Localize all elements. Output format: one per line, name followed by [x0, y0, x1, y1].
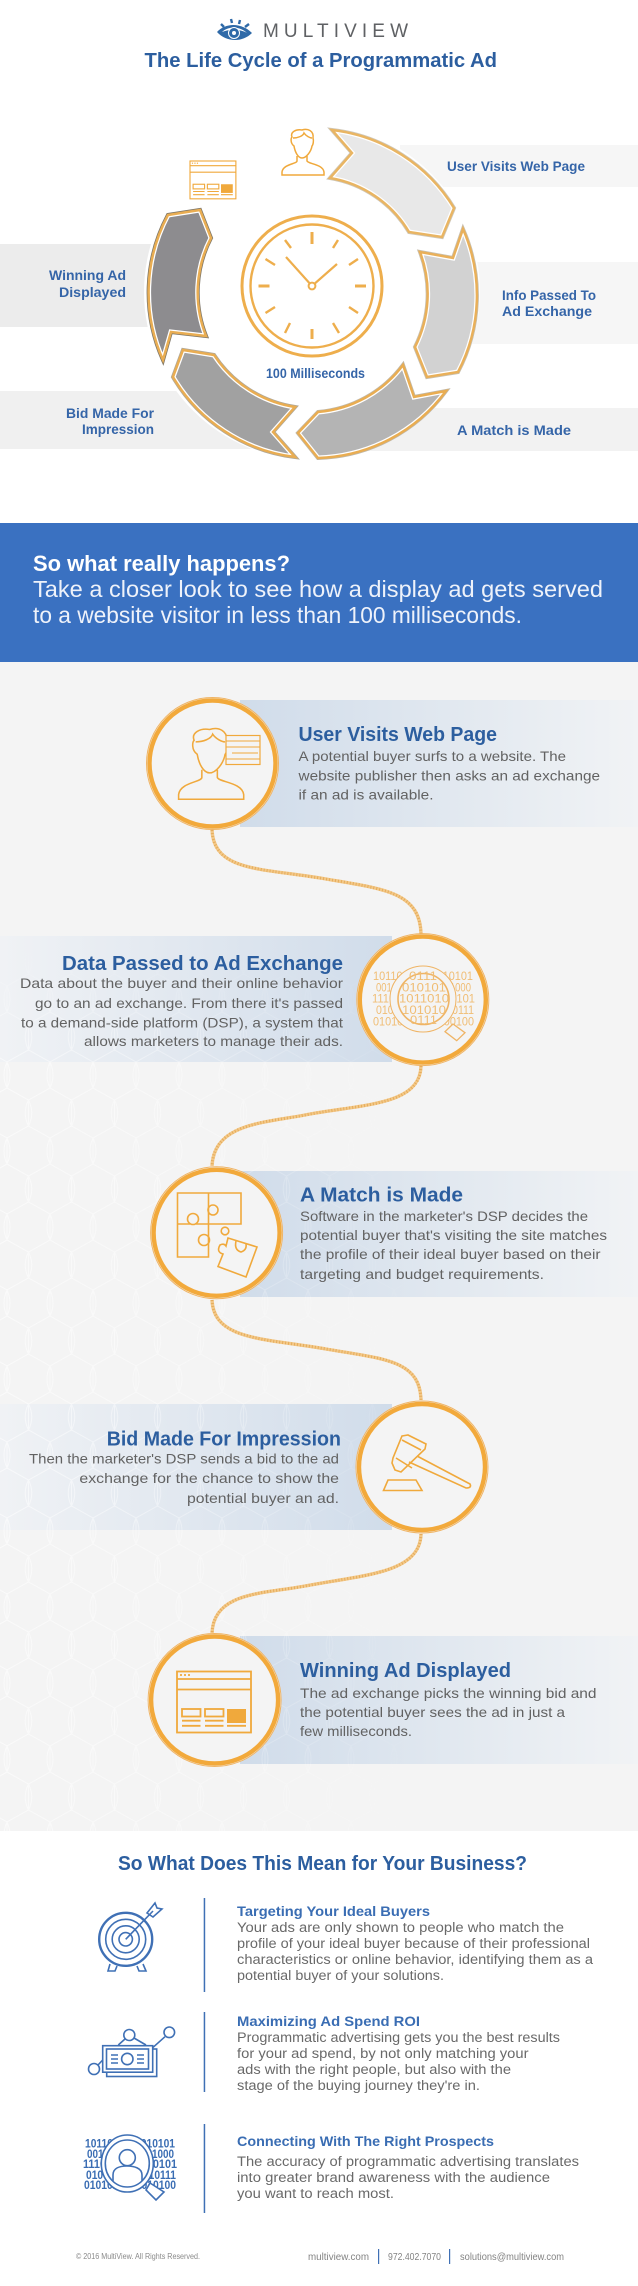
heading: Winning Ad Displayed — [300, 1659, 511, 1682]
body: the potential buyer sees the ad in just a — [300, 1704, 565, 1720]
label: winning ad displayed: Displayed — [59, 284, 126, 300]
icon: target — [99, 1903, 162, 1971]
step 4: bid made for impression — [29, 1401, 488, 1533]
arrow: winning — [149, 210, 211, 360]
title: The Life Cycle of a Programmatic Ad — [144, 50, 497, 72]
label band: bid made — [0, 391, 300, 449]
label band: a match — [340, 408, 638, 451]
heading: Bid Made For Impression — [107, 1428, 341, 1451]
connector: step 1 to 2 — [212, 830, 421, 934]
icon: person magnifier with data: 0101010100010100 — [84, 2180, 176, 2192]
icon: puzzle — [178, 1193, 257, 1277]
label: user visits web page: User Visits Web Page — [447, 158, 585, 174]
circle — [148, 1634, 281, 1766]
icon: data magnifier — [372, 966, 475, 1041]
circle — [151, 1167, 283, 1299]
body: website publisher then asks an ad exchange — [297, 768, 600, 784]
icon: data magnifier: 10110101110110101 — [373, 969, 473, 983]
arrow: match — [298, 365, 446, 458]
copyright: © 2016 MultiView. All Rights Reserved. — [76, 2251, 200, 2261]
banner text: to a website visitor in less than 100 milliseconds. — [33, 602, 522, 628]
item body: into greater brand awareness with the audience — [237, 2170, 550, 2185]
connector: step 2 to 3 — [212, 1066, 421, 1166]
icon: data magnifier: 101010 — [402, 1003, 446, 1017]
step 5: winning ad displayed — [148, 1634, 596, 1766]
item body: characteristics or online behavior, identifying them as a — [237, 1952, 594, 1967]
divider — [204, 2012, 205, 2092]
cycle diagram — [0, 124, 638, 460]
arrow: user visits — [330, 130, 454, 237]
body: Data about the buyer and their online behavior — [20, 975, 343, 991]
item body — [237, 1920, 594, 1983]
icon: person magnifier with data: 0100100100010111 — [86, 2170, 177, 2182]
panel: step process — [0, 662, 638, 1831]
body: the profile of their ideal buyer based on their — [300, 1246, 601, 1262]
icon: data magnifier: 01010101110100100 — [373, 1014, 474, 1028]
item body: you want to reach most. — [237, 2186, 394, 2201]
item heading: Connecting With The Right Prospects — [237, 2133, 494, 2149]
icon: money with nodes — [88, 2027, 175, 2076]
body — [300, 1685, 596, 1739]
icon: person — [282, 129, 324, 175]
body: allows marketers to manage their ads. — [84, 1033, 343, 1049]
item body: potential buyer of your solutions. — [237, 1968, 444, 1983]
icon: data magnifier: 001010101010101000 — [376, 981, 471, 995]
item heading: Maximizing Ad Spend ROI — [237, 2013, 420, 2029]
label: info passed to ad exchange: Ad Exchange — [502, 303, 592, 319]
heading: User Visits Web Page — [298, 723, 497, 746]
label: winning ad displayed: Winning Ad — [49, 267, 126, 283]
item: targeting your ideal buyers — [99, 1898, 594, 1992]
phone: 972.402.7070 — [388, 2251, 441, 2263]
circle — [357, 934, 489, 1066]
body: targeting and budget requirements. — [300, 1266, 544, 1282]
body: potential buyer that's visiting the site matches — [300, 1227, 607, 1243]
item body: The accuracy of programmatic advertising translates — [237, 2154, 579, 2169]
banner text: Take a closer look to see how a display ad gets served — [33, 576, 603, 602]
body: Software in the marketer's DSP decides the — [300, 1208, 588, 1224]
banner text — [33, 576, 603, 628]
item: connecting with the right prospects — [83, 2124, 579, 2213]
item: maximizing ad spend roi — [88, 2012, 560, 2093]
step 2: data passed to ad exchange — [20, 934, 489, 1066]
item body: Your ads are only shown to people who match the — [237, 1920, 564, 1935]
label: info passed to ad exchange: Info Passed To — [502, 287, 596, 303]
arrow: info passed — [415, 229, 477, 377]
ring backing — [144, 124, 480, 460]
icon: web page — [190, 161, 236, 199]
icon: gavel — [384, 1435, 470, 1490]
body — [297, 748, 600, 802]
circle — [146, 698, 278, 830]
divider — [204, 2124, 205, 2213]
body: go to an ad exchange. From there it's passed — [35, 995, 343, 1011]
step 3: a match is made — [151, 1167, 607, 1299]
label: winning ad displayed — [49, 267, 126, 300]
label: bid made for impression: Bid Made For — [66, 405, 155, 421]
band: step 4 — [0, 1404, 392, 1530]
body: Then the marketer's DSP sends a bid to the ad — [29, 1451, 339, 1467]
label band: winning ad — [0, 244, 190, 327]
label: 100 milliseconds: 100 Milliseconds — [266, 365, 365, 381]
icon: web page — [177, 1672, 251, 1732]
body — [300, 1208, 607, 1282]
divider — [204, 1898, 205, 1992]
clock — [242, 216, 382, 356]
body — [20, 975, 343, 1049]
banner heading: So what really happens? — [33, 551, 290, 576]
label: bid made for impression — [66, 405, 155, 437]
band: step 1 — [240, 700, 638, 827]
icon: person with web page — [179, 729, 260, 799]
heading: Data Passed to Ad Exchange — [62, 952, 343, 975]
label: bid made for impression: Impression — [82, 421, 154, 437]
body: The ad exchange picks the winning bid and — [300, 1685, 596, 1701]
icon: data magnifier: 0111 — [410, 1013, 437, 1027]
icon: data magnifier: 010101 — [402, 981, 446, 995]
body: few milliseconds. — [300, 1723, 412, 1739]
body — [29, 1451, 339, 1506]
icon: person magnifier with data: 1011001100010101 — [85, 2139, 176, 2151]
item body — [237, 2030, 560, 2093]
footer — [76, 2249, 564, 2264]
item body: stage of the buying journey they're in. — [237, 2078, 480, 2093]
panel: so what really happens banner — [0, 523, 638, 662]
icon: person magnifier with data — [83, 2135, 178, 2200]
connector: step 4 to 5 — [212, 1534, 421, 1633]
item body — [237, 2154, 579, 2201]
step 1: user visits web page — [146, 698, 600, 830]
logo wordmark: MULTIVIEW — [263, 21, 408, 42]
website: multiview.com — [308, 2251, 369, 2263]
icon: data magnifier: 01001010101010111 — [376, 1003, 474, 1017]
arrow: bid — [173, 350, 295, 457]
heading: A Match is Made — [300, 1184, 463, 1206]
item body: profile of your ideal buyer because of their professional — [237, 1936, 590, 1951]
band: step 5 — [240, 1636, 638, 1764]
body: exchange for the chance to show the — [79, 1470, 339, 1486]
heading: business section: So What Does This Mean for Your Business? — [118, 1853, 527, 1875]
label band: user visits — [400, 145, 638, 187]
email: solutions@multiview.com — [460, 2251, 564, 2263]
item heading: Targeting Your Ideal Buyers — [237, 1903, 430, 1919]
body: A potential buyer surfs to a website. The — [298, 748, 566, 764]
icon: person magnifier with data: 1110011100010101 — [83, 2159, 178, 2171]
icon: person magnifier with data: 0011100010001000 — [87, 2149, 174, 2161]
icon: eye — [217, 19, 252, 40]
icon: data magnifier: 0111 — [409, 969, 437, 983]
circle — [356, 1401, 488, 1533]
item body: for your ad spend, by not only matching your — [237, 2046, 529, 2061]
logo: Multiview — [217, 19, 408, 42]
label: a match is made: A Match is Made — [457, 422, 571, 438]
label: info passed to ad exchange — [502, 287, 596, 319]
body: to a demand-side platform (DSP), a system that — [21, 1014, 343, 1030]
band: step 2 — [0, 936, 392, 1062]
body: potential buyer an ad. — [187, 1490, 339, 1506]
connector: step 3 to 4 — [212, 1300, 421, 1400]
item body: Programmatic advertising gets you the best results — [237, 2030, 560, 2045]
label band: info passed — [440, 262, 638, 344]
item body: ads with the right people, but also with the — [237, 2062, 511, 2077]
icon: data magnifier: 11101011010100101 — [372, 992, 475, 1006]
band: step 3 — [240, 1171, 638, 1297]
icon: data magnifier: 1011010 — [399, 992, 449, 1006]
body: if an ad is available. — [298, 786, 434, 802]
